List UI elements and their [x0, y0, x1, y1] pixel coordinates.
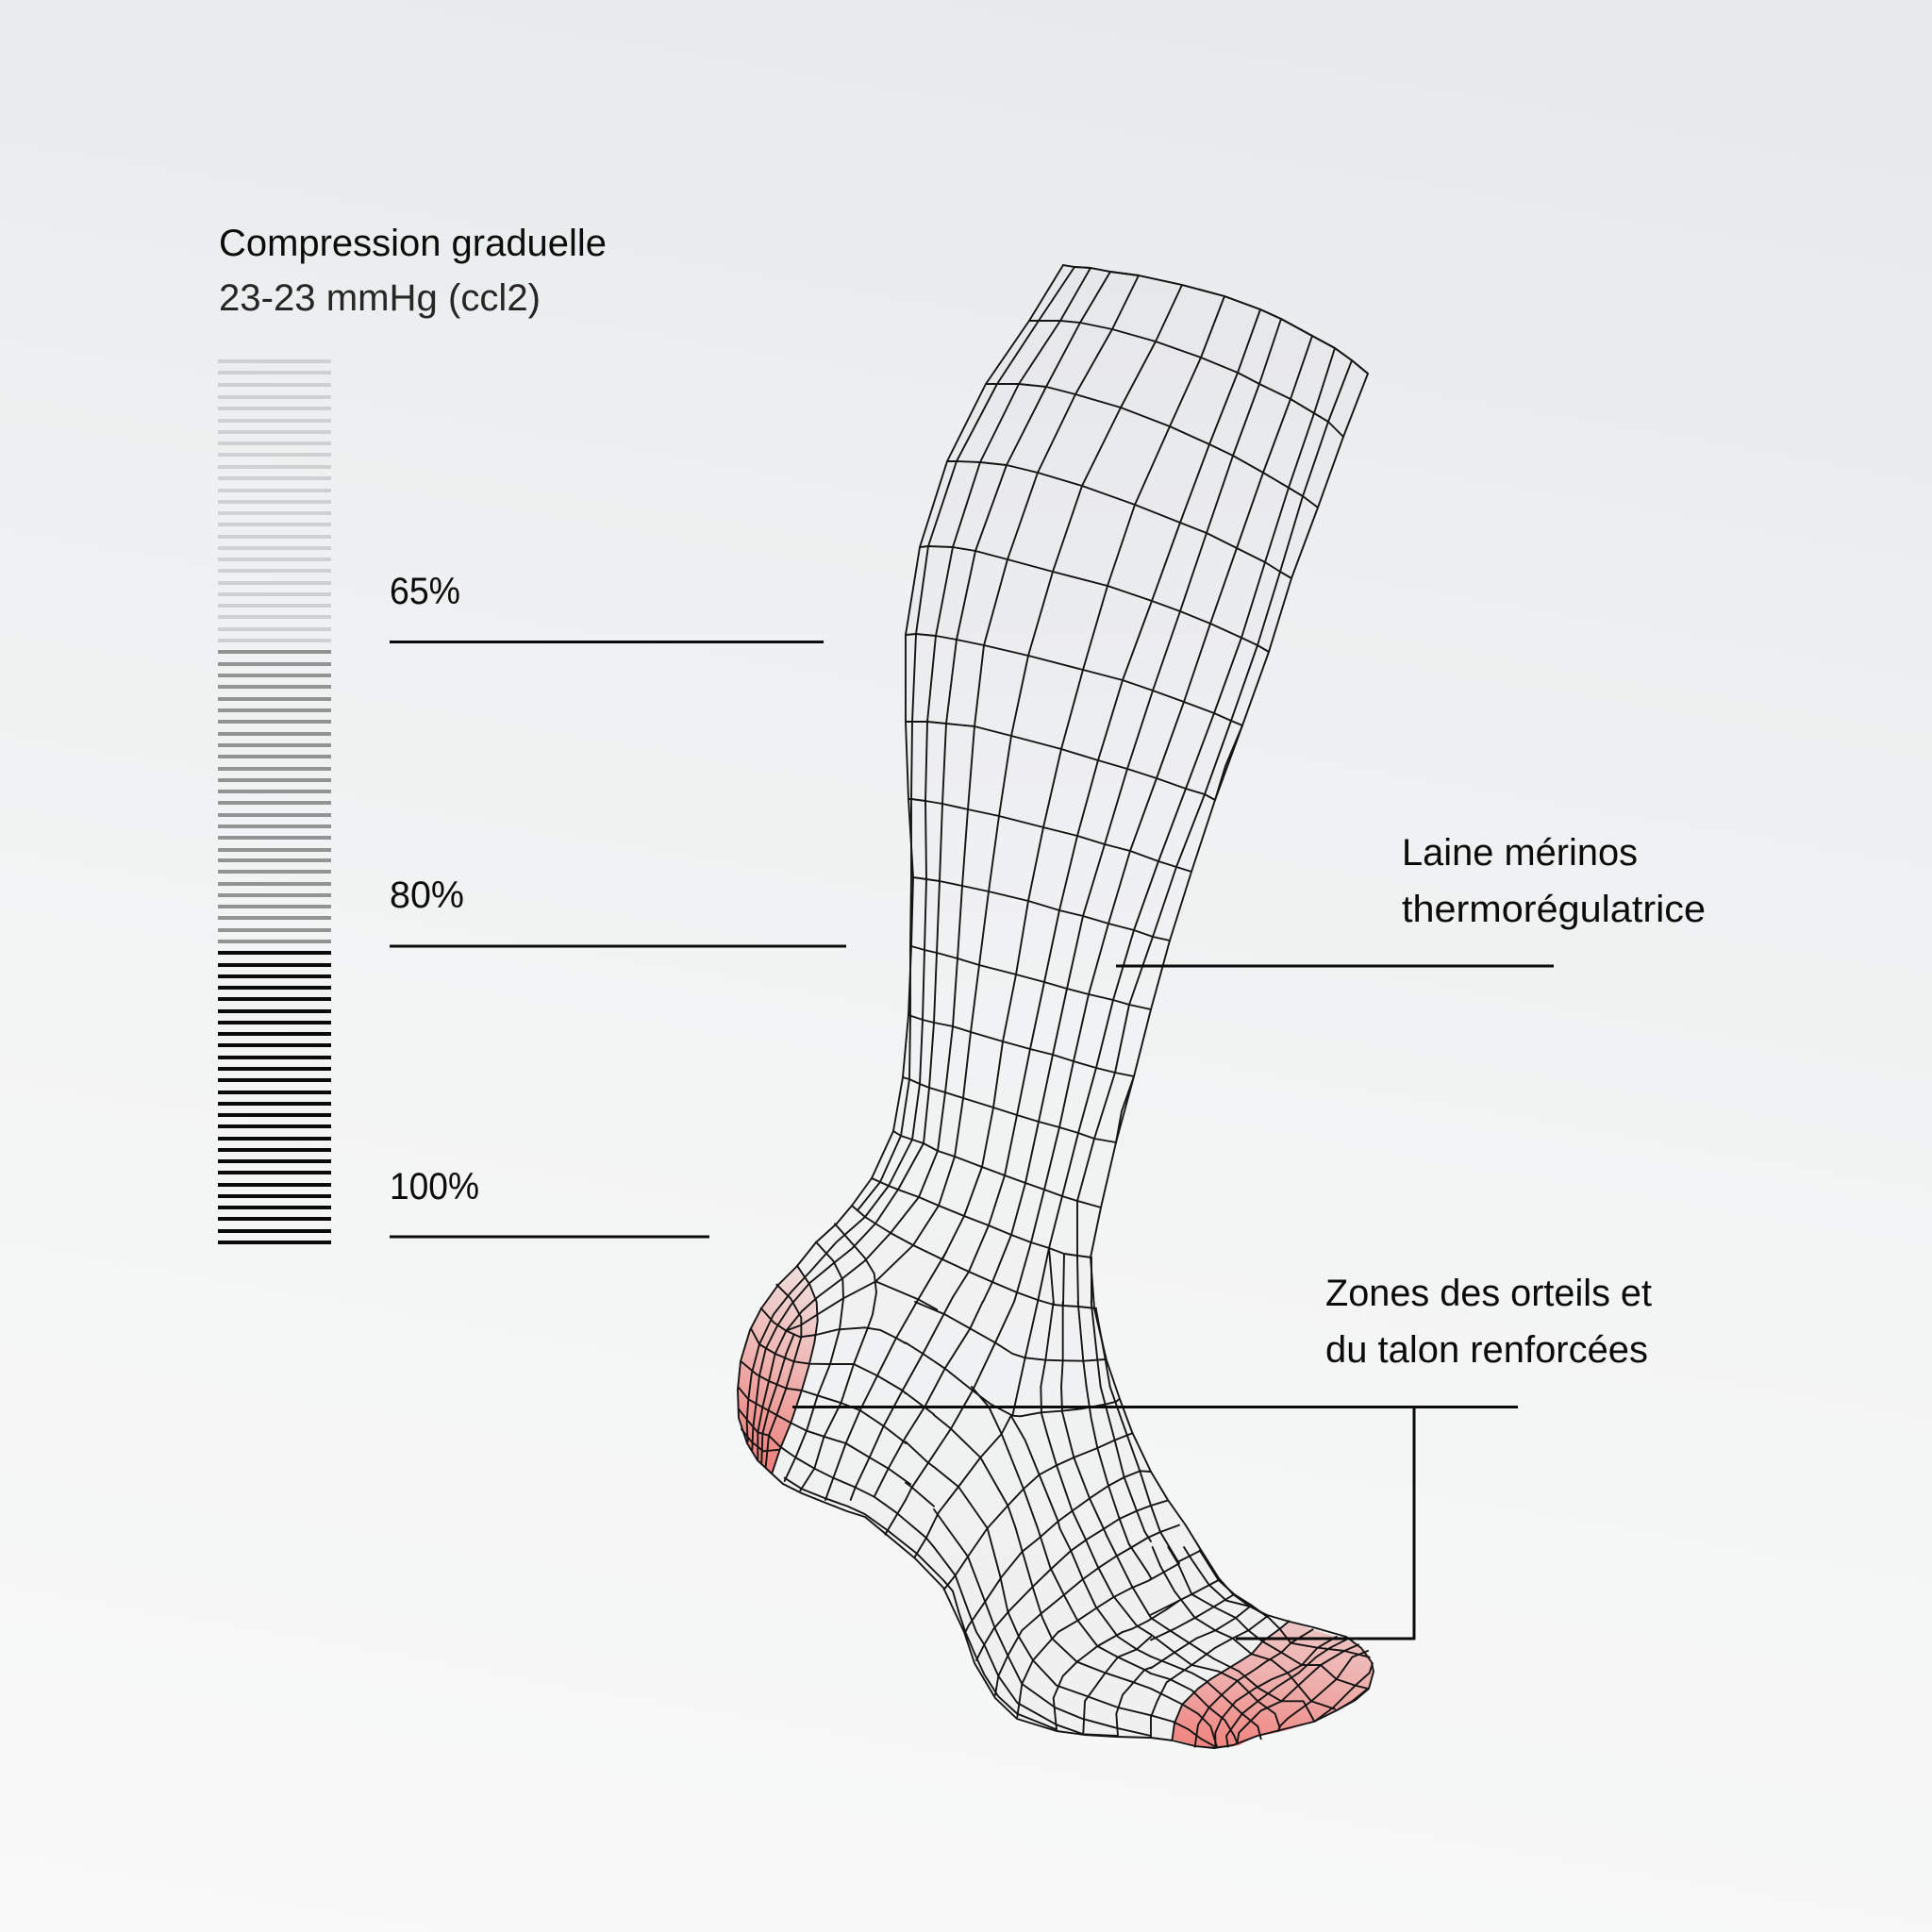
instep mesh — [915, 1387, 1179, 1632]
callout: zones des orteils et du talon renforcées — [792, 1273, 1652, 1640]
heading: compression graduelle: 23-23 mmHg (ccl2) — [219, 277, 541, 319]
reinforced heel zone — [738, 1266, 818, 1474]
heading: compression graduelle — [219, 223, 607, 319]
dark stripes — [218, 951, 331, 1244]
sock silhouette fill — [738, 265, 1374, 1748]
leg mesh columns — [858, 267, 1352, 1307]
reinforced toe zone — [1173, 1621, 1374, 1748]
callout: laine mérinos thermorégulatrice: thermorégulatrice — [1402, 889, 1706, 930]
label: 100% with leader: 100% — [390, 1166, 479, 1208]
callout: zones des orteils et du talon renforcées: Zones des orteils et — [1325, 1273, 1652, 1314]
midfoot mesh — [906, 1302, 1119, 1507]
sole mesh — [785, 1478, 953, 1591]
callout: laine mérinos thermorégulatrice: Laine mérinos — [1402, 832, 1638, 874]
compression scale: striped bar — [218, 359, 331, 1244]
leg mesh rows — [852, 265, 1368, 1308]
sock wireframe illustration — [738, 265, 1374, 1748]
callout: laine mérinos thermorégulatrice — [1116, 832, 1706, 966]
sock outline — [738, 265, 1374, 1748]
medium stripes — [218, 650, 331, 943]
label: 80% with leader: 80% — [390, 874, 464, 916]
heel mesh — [738, 1217, 953, 1500]
heading: compression graduelle: Compression graduelle — [219, 223, 607, 264]
forefoot mesh — [934, 1528, 1151, 1738]
callout: zones des orteils et du talon renforcées: du talon renforcées — [1325, 1329, 1648, 1371]
label: 65% with leader: 65% — [390, 571, 460, 612]
light stripes — [218, 359, 331, 642]
toe mesh — [1151, 1547, 1373, 1747]
